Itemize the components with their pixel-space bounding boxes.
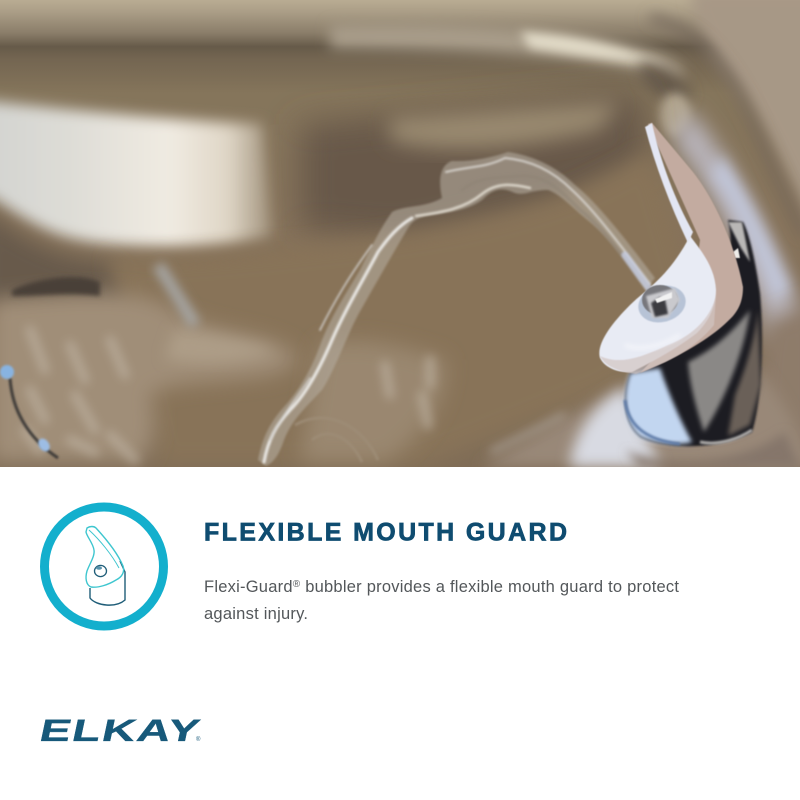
bubbler nozzle bbox=[638, 284, 686, 323]
water stream bbox=[258, 152, 655, 466]
logo: Elkay: ® bbox=[196, 736, 201, 743]
body text bbox=[204, 578, 679, 623]
icon: bubbler line drawing bbox=[86, 526, 125, 605]
body text: bubbler provides a flexible mouth guard to protect bbox=[300, 578, 679, 596]
chrome bubbler body bbox=[625, 220, 762, 446]
icon ring bbox=[44, 507, 164, 626]
body text: against injury. bbox=[204, 605, 308, 623]
body text: ® bbox=[293, 579, 301, 590]
heading: FLEXIBLE MOUTH GUARD bbox=[204, 518, 567, 546]
blurred basin background bbox=[0, 0, 800, 467]
flexible mouth guard bbox=[599, 123, 743, 374]
blurred water ripples on the left bbox=[0, 265, 446, 462]
body text: Flexi-Guard bbox=[204, 578, 293, 596]
icon: bubbler in teal ring bbox=[44, 507, 164, 626]
fountain base plate bbox=[480, 370, 800, 467]
photo: water fountain with flexible bubbler bbox=[0, 0, 800, 467]
logo: Elkay: ELKAY bbox=[37, 714, 203, 748]
